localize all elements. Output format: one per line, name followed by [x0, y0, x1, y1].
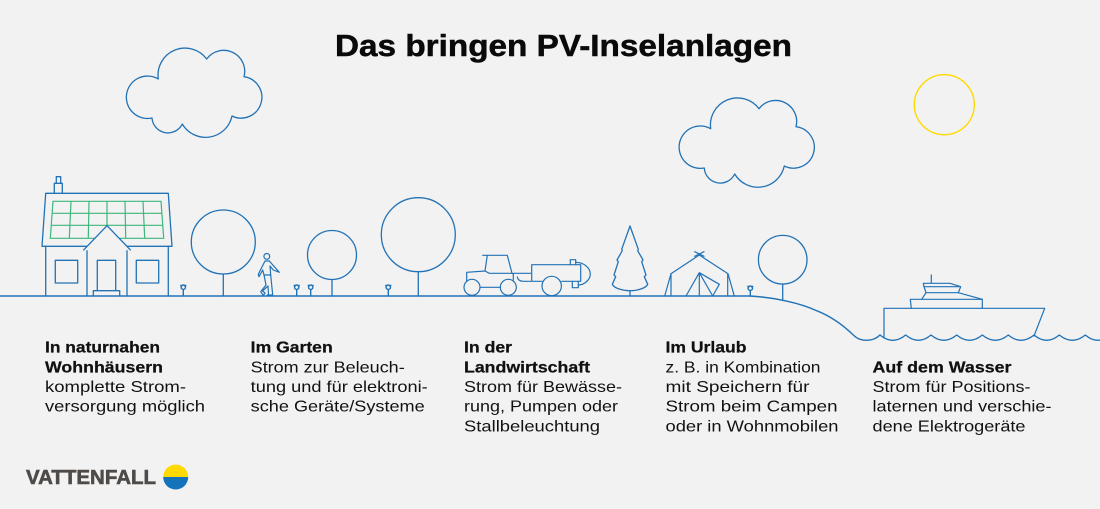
- text block: Garten: Strom zur Beleuch-: [251, 359, 405, 376]
- tree 4: [758, 235, 807, 300]
- text block: Wohnhäuser: [45, 339, 205, 416]
- tank: [532, 265, 581, 281]
- hull: [884, 308, 1045, 338]
- title: Das bringen PV-Inselanlagen: [335, 29, 792, 63]
- icon: house with solar panels: [42, 177, 172, 296]
- icon: cloud right: [679, 98, 814, 187]
- chimney: [54, 177, 62, 193]
- tractor body: [467, 271, 513, 287]
- icon: sun: [914, 75, 974, 135]
- text block: Urlaub: Strom beim Campen: [666, 399, 838, 416]
- text block: Landwirtschaft: Stallbeleuchtung: [464, 418, 600, 435]
- text block: Wasser: Auf dem Wasser: [872, 359, 1012, 376]
- tree 2: [308, 230, 356, 296]
- tree 1: [191, 210, 255, 296]
- icon: cloud left: [126, 48, 262, 137]
- text block: Garten: [251, 339, 428, 416]
- tree 3: [381, 198, 455, 296]
- logo: Vattenfall: VATTENFALL: [26, 466, 156, 489]
- text block: Wasser: dene Elektrogeräte: [872, 418, 1026, 435]
- text block: Urlaub: Im Urlaub: [666, 339, 747, 356]
- text block: Urlaub: oder in Wohnmobilen: [666, 418, 838, 435]
- door and step: [93, 260, 120, 296]
- upper cabin: [922, 293, 982, 299]
- icon: pine tree: [612, 226, 648, 296]
- text block: Wasser: [872, 359, 1052, 435]
- text block: Wohnhäuser: In naturnahen: [45, 339, 160, 356]
- text block: Landwirtschaft: [464, 339, 622, 435]
- lower cabin: [910, 299, 982, 308]
- text block: Urlaub: mit Speichern für: [666, 379, 810, 396]
- text block: Garten: Im Garten: [251, 339, 333, 356]
- solar panels: [50, 201, 164, 238]
- text block: Wohnhäuser: versorgung möglich: [45, 399, 205, 416]
- gable: [83, 226, 131, 250]
- cab: [483, 255, 512, 273]
- text block: Landwirtschaft: rung, Pumpen oder: [464, 399, 619, 416]
- roof: [42, 193, 172, 246]
- text block: Urlaub: [666, 339, 838, 435]
- flowers: [181, 285, 753, 296]
- wheels: [464, 279, 480, 295]
- walls: [46, 246, 168, 296]
- text block: Wohnhäuser: Wohnhäusern: [45, 359, 163, 376]
- text block: Wohnhäuser: komplette Strom-: [45, 379, 186, 396]
- icon: tractor with tank trailer: [464, 255, 590, 296]
- windows: [55, 260, 78, 283]
- text block: Urlaub: z. B. in Kombination: [666, 359, 820, 376]
- text block: Wasser: laternen und verschie-: [872, 399, 1052, 416]
- icon: walking person: [258, 254, 279, 296]
- text block: Wasser: Strom für Positions-: [872, 379, 1030, 396]
- icon: boat: [884, 275, 1045, 338]
- drawbar: [513, 273, 531, 281]
- text block: Garten: sche Geräte/Systeme: [251, 399, 425, 416]
- water waves: [880, 335, 1100, 340]
- text block: Landwirtschaft: Strom für Bewässe-: [464, 379, 622, 396]
- ground line and hill: [0, 296, 880, 340]
- icon: tent: [665, 252, 734, 296]
- text block: Landwirtschaft: Landwirtschaft: [464, 359, 591, 376]
- text block: Garten: tung und für elektroni-: [251, 379, 428, 396]
- text block: Landwirtschaft: In der: [464, 339, 512, 356]
- top deck: [923, 275, 961, 293]
